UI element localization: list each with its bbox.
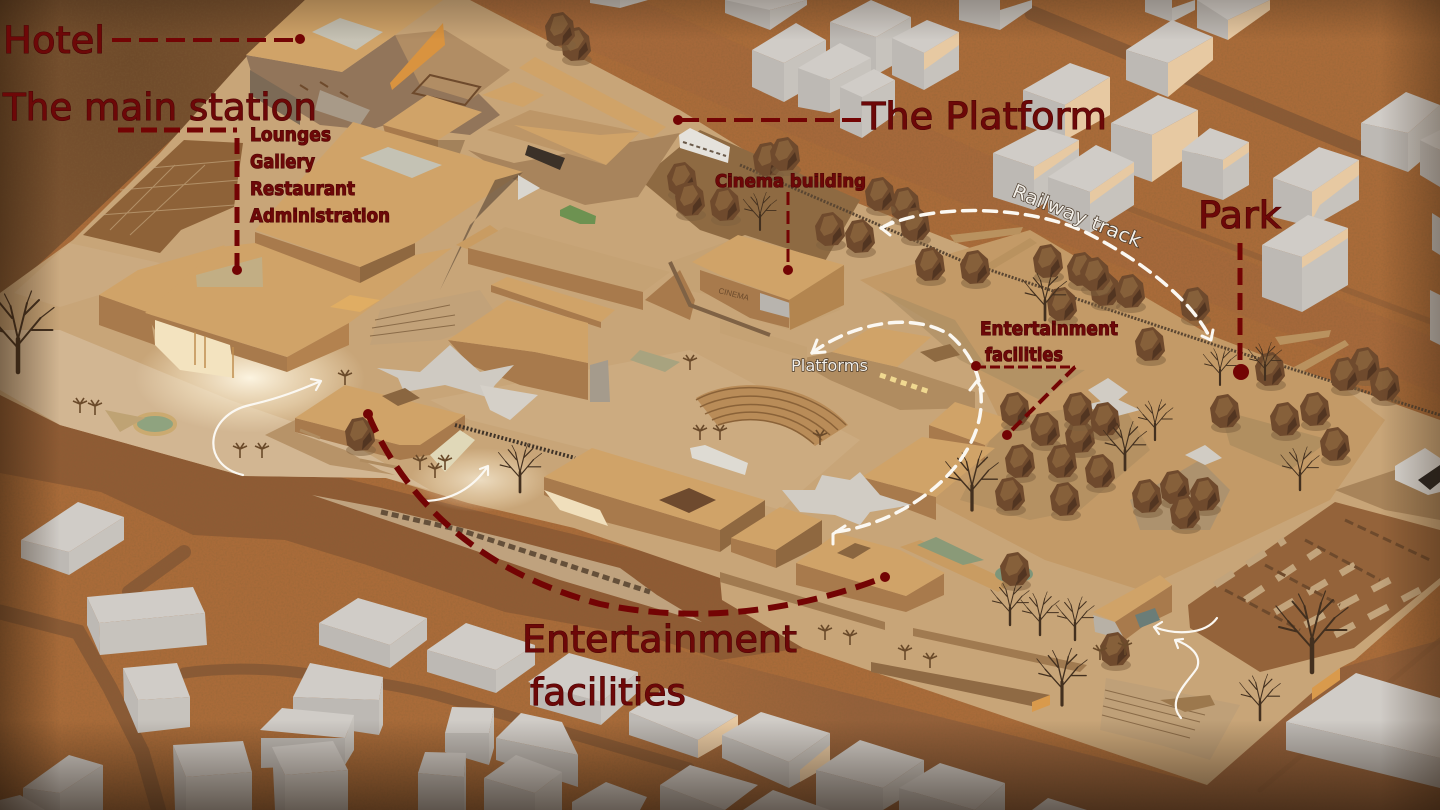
south east darker ground	[600, 630, 1440, 810]
station train	[679, 128, 730, 163]
label: The Platform	[673, 95, 1107, 138]
label: Entertainment facilities (north): Entertainment	[980, 318, 1118, 340]
south stepped terrace and walls	[720, 572, 1340, 760]
cinema building	[645, 235, 845, 335]
palms	[73, 355, 1132, 668]
label: Entertainment facilities (north): facilities	[985, 344, 1063, 366]
amphitheatre	[696, 385, 848, 446]
list: main station programme: Lounges	[250, 124, 331, 146]
glazed entrance	[155, 320, 235, 378]
parked vehicles	[1395, 448, 1440, 495]
hotel skylight	[312, 18, 383, 50]
label: Cinema building: Cinema building	[715, 171, 866, 192]
area north of cinema	[640, 130, 860, 270]
park trees	[345, 12, 1401, 671]
white arrow: south terrace entry	[1175, 639, 1198, 718]
label: Platforms: Platforms	[791, 356, 868, 375]
lower ground band	[0, 380, 803, 660]
courtyard opening	[837, 543, 871, 559]
rail line through plaza	[455, 425, 575, 458]
label: The main station: The main station	[2, 86, 317, 129]
terraces and stairs	[370, 227, 670, 345]
white dashed arrow: platforms arc	[812, 322, 983, 544]
label: Park: Park	[1198, 194, 1282, 237]
central plaza	[430, 350, 860, 510]
cinema building: CINEMA	[718, 286, 751, 303]
embankment tree row	[381, 512, 650, 592]
label: Railway track: Railway track	[1009, 180, 1144, 252]
label: Hotel	[3, 19, 305, 62]
white arrow: east pavilion entry	[1154, 618, 1217, 634]
label: Entertainment facilities (south): facilities	[530, 671, 686, 714]
entertainment building south	[796, 533, 1014, 612]
list: main station programme: Administration	[250, 205, 390, 227]
list: main station programme: Gallery	[250, 151, 316, 173]
list: main station programme: Restaurant	[250, 178, 355, 200]
west forecourt	[0, 330, 430, 490]
white arrow: west plaza entry	[213, 379, 321, 475]
platform building	[383, 57, 680, 205]
entertainment buildings north	[720, 320, 1012, 520]
entertainment building centre	[544, 448, 765, 552]
green tram	[560, 205, 596, 224]
context buildings south	[0, 502, 1440, 810]
bridges over rail	[950, 227, 1023, 243]
parking lot	[1188, 470, 1440, 672]
label: Park	[1198, 194, 1282, 380]
label: Cinema building	[715, 171, 866, 275]
entertainment building west	[265, 385, 475, 475]
label: The Platform: The Platform	[861, 95, 1107, 138]
railway track	[740, 165, 1440, 415]
white arrow: south plaza entry	[425, 466, 488, 501]
entry pavilion	[1093, 575, 1172, 640]
main station	[99, 122, 540, 378]
dark terrain top left	[0, 0, 310, 300]
south strip	[312, 495, 702, 622]
entrance plaza glow	[135, 323, 365, 433]
fabric canopy west	[377, 345, 538, 420]
bare trees	[0, 192, 1348, 720]
label: Entertainment facilities (south): Entertainment	[522, 618, 797, 661]
white bus and ponds	[105, 350, 1033, 583]
label: Entertainment facilities (north)	[971, 318, 1118, 440]
roof skylight	[360, 147, 442, 178]
fabric canopies east	[782, 378, 1222, 525]
west courtyard	[14, 243, 160, 307]
central building	[448, 300, 610, 402]
list: main station programme	[250, 124, 390, 227]
label: Entertainment facilities (south)	[363, 409, 890, 714]
west parking	[83, 140, 243, 253]
white dashed arrow: railway track arc	[881, 211, 1213, 340]
small pavilion	[731, 507, 822, 568]
hotel building	[246, 0, 510, 135]
main station upper roof	[255, 122, 523, 267]
label: The main station	[2, 86, 317, 275]
park ground	[860, 230, 1385, 590]
label: Hotel: Hotel	[3, 19, 105, 62]
context buildings north	[590, 0, 1440, 345]
north road	[470, 0, 1440, 395]
